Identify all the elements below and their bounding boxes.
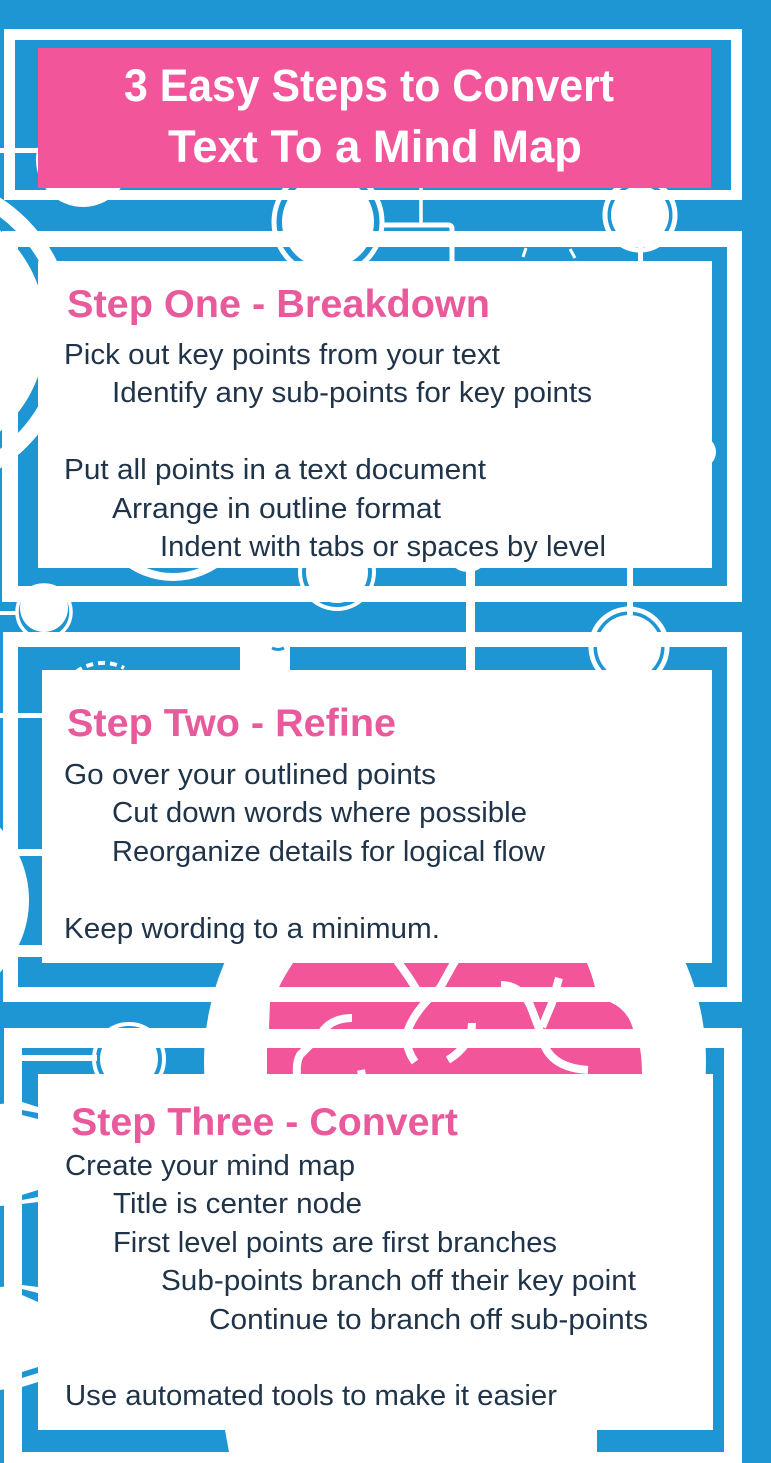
text block: step three [65, 1150, 648, 1412]
node: below step one left [97, 425, 249, 577]
branch: step two left upper [0, 713, 44, 718]
title text [124, 60, 614, 172]
text block: step three: Continue to branch off sub-points [209, 1304, 648, 1336]
panel frame: step two [3, 632, 742, 1002]
text block: step one: Put all points in a text document [64, 454, 486, 486]
text block: step one: Pick out key points from your text [64, 339, 500, 371]
text block: step three: Title is center node [113, 1188, 362, 1220]
nodes: step three left [0, 1102, 38, 1390]
text block: step three: First level points are first branches [113, 1227, 557, 1259]
node: left between steps [0, 584, 71, 639]
branch: step two left lower [0, 849, 44, 856]
text block: step one: Identify any sub-points for key points [112, 377, 592, 409]
text block: step two: Reorganize details for logical flow [112, 836, 546, 868]
panel: step three [38, 1074, 713, 1430]
node: below step one centre [300, 535, 374, 609]
heading: step one: Step One - Breakdown [67, 283, 490, 326]
text block: step one [64, 339, 606, 563]
node: step two left [0, 795, 29, 1005]
text block: step three: Create your mind map [65, 1150, 355, 1182]
node: top right with ring [605, 180, 675, 265]
icon: pink brain in central node [267, 961, 642, 1075]
branch: vertical far right [627, 560, 633, 615]
branch: vertical right [466, 560, 475, 672]
dashed node step two [76, 663, 124, 672]
node: right edge step one [684, 436, 716, 468]
text block: step three: Use automated tools to make it easier [65, 1380, 557, 1412]
panel frame: step three [4, 1028, 742, 1463]
title text: Text To a Mind Map [168, 121, 582, 172]
node: title left [0, 113, 130, 207]
node: below step one right [446, 528, 490, 572]
text block: step one: Indent with tabs or spaces by level [160, 531, 606, 563]
heading: step two: Step Two - Refine [67, 702, 396, 745]
node: top of step two [240, 645, 290, 672]
panel: step one [38, 261, 712, 568]
text block: step three: Sub-points branch off their key point [161, 1265, 636, 1297]
text block: step one: Arrange in outline format [112, 493, 441, 525]
text block: step two [64, 759, 546, 945]
text block: step two: Go over your outlined points [64, 759, 436, 791]
branch: step two left band [0, 945, 44, 957]
dashed node top [523, 248, 575, 258]
central node: large white circle [204, 811, 706, 1452]
node: step three top [22, 1024, 164, 1094]
panel frame: step one [2, 231, 742, 602]
text block: step two: Keep wording to a minimum. [64, 913, 440, 945]
title frame [4, 29, 742, 200]
heading: step three: Step Three - Convert [71, 1101, 458, 1144]
title text: 3 Easy Steps to Convert [124, 60, 614, 111]
node: large left step one [0, 180, 66, 486]
node: centre top with ring [274, 168, 382, 276]
branch: top connector [380, 186, 452, 262]
text block: step two: Cut down words where possible [112, 797, 527, 829]
panel: step two [42, 670, 712, 963]
title banner [38, 48, 711, 188]
node: right between steps [591, 609, 667, 685]
